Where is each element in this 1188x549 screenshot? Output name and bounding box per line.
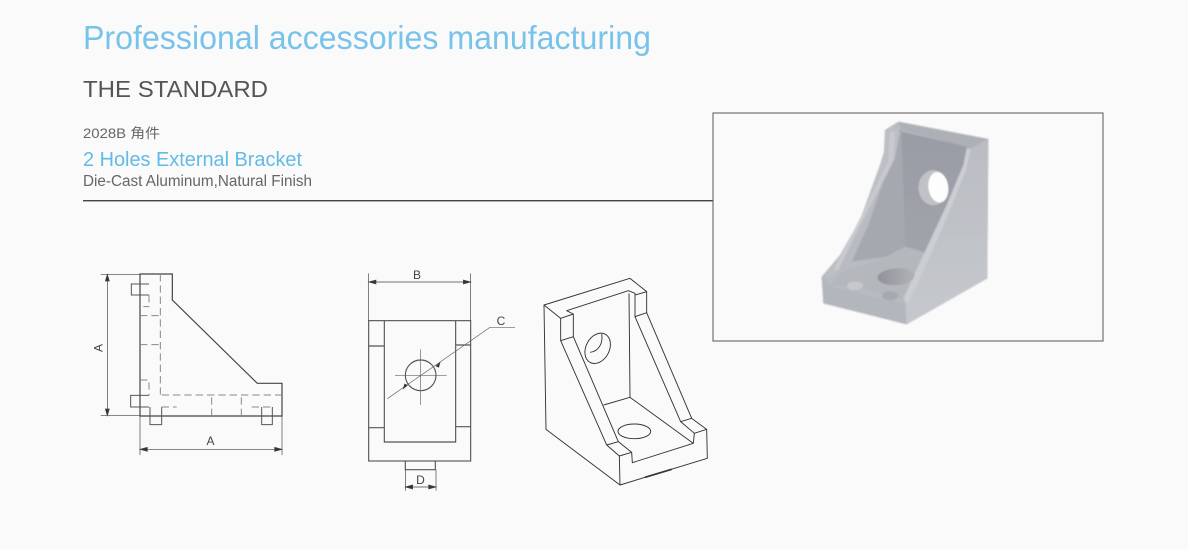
drawing: front view	[369, 273, 515, 491]
subtitle: the standard: THE STANDARD	[83, 76, 268, 102]
wall hole	[580, 329, 615, 368]
hidden lines	[140, 274, 282, 416]
centre lines and leader	[387, 327, 515, 405]
divider line	[83, 200, 713, 201]
product code: 2028B 角件	[83, 126, 160, 141]
dimension lines	[369, 273, 471, 491]
label A horizontal: A	[206, 434, 215, 448]
bracket outline	[140, 274, 282, 416]
outer contour	[544, 278, 707, 485]
label A vertical: A	[92, 344, 106, 352]
hole	[405, 360, 436, 391]
label C: C	[497, 314, 506, 328]
label D: D	[416, 473, 425, 487]
top inner edges	[544, 291, 647, 341]
stud	[405, 461, 435, 470]
label B: B	[413, 268, 421, 282]
dimension A vertical	[101, 274, 140, 416]
dimension A horizontal	[140, 416, 282, 455]
photo: aluminium bracket	[822, 122, 988, 324]
front lip	[607, 433, 694, 485]
inner floor and back edge	[604, 293, 693, 443]
side ribs	[369, 345, 471, 428]
drawing: isometric view	[544, 278, 707, 485]
drawing: side view	[101, 274, 282, 455]
product name: 2 Holes External Bracket	[83, 149, 302, 171]
inner recess	[384, 321, 456, 442]
material description: Die-Cast Aluminum,Natural Finish	[83, 173, 312, 190]
ribs	[561, 313, 707, 445]
floor hole	[618, 424, 651, 439]
title: Professional accessories manufacturing	[83, 19, 651, 56]
panel: product photo	[713, 113, 1103, 341]
body outline	[369, 321, 471, 461]
bolts	[131, 284, 272, 425]
bottom stud	[645, 469, 672, 477]
